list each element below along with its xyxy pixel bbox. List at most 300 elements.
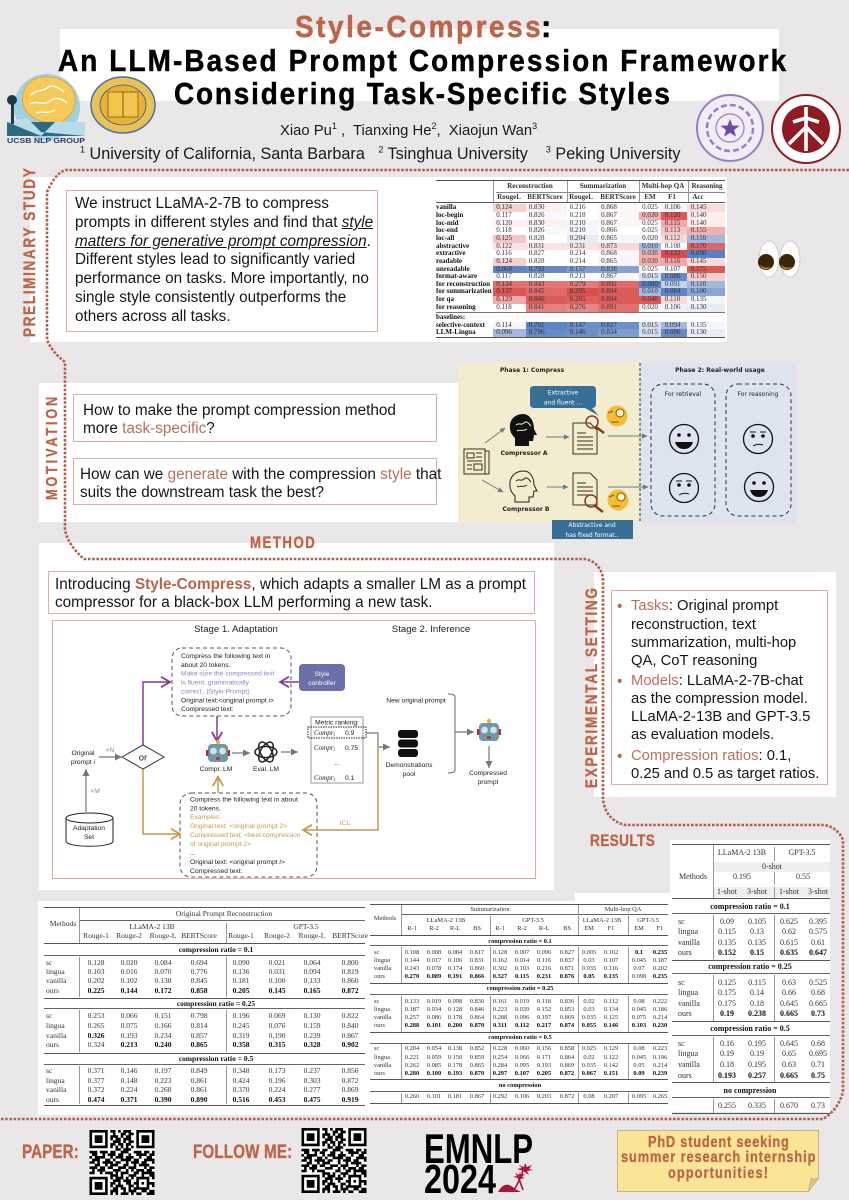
- title: Style-Compress: [295, 10, 541, 44]
- prompt box: ICL examples: Compressed text:: [190, 868, 243, 875]
- table: original prompt reconstruction: 0.076: [269, 1021, 285, 1030]
- heatmap table: styles across tasks: 0.214: [570, 257, 586, 265]
- icon: source document: [464, 449, 489, 474]
- QR code: paper: [90, 1130, 154, 1195]
- heatmap table: styles across tasks: 0.030: [642, 257, 658, 265]
- table: original prompt reconstruction: 0.145: [269, 986, 285, 995]
- table: original prompt reconstruction: 0.371: [121, 1095, 137, 1104]
- heatmap table: styles across tasks: loc-begin: [436, 211, 463, 219]
- table: summarization and multi-hop QA: 0.122: [604, 1054, 618, 1061]
- table: summarization and multi-hop QA: 0.08: [633, 998, 645, 1005]
- logo: Tsinghua seal: [696, 94, 764, 162]
- table: summarization and multi-hop QA: 0.103: [515, 965, 529, 972]
- icon: compressed document A: [573, 423, 597, 454]
- table: summarization and multi-hop QA: sc: [374, 998, 379, 1005]
- metric ranking box: [308, 717, 366, 783]
- table: original prompt reconstruction: 0.094: [304, 967, 320, 976]
- table: CoT reasoning shots: 0.255: [718, 1101, 736, 1110]
- text block: experimental setup: [611, 590, 828, 785]
- original prompt label: ×M: [90, 788, 100, 795]
- table: original prompt reconstruction: lingua: [46, 1076, 65, 1085]
- arrows: [482, 428, 648, 492]
- table: summarization and multi-hop QA: 0.864: [470, 1014, 484, 1021]
- table: original prompt reconstruction: 0.224: [269, 1085, 285, 1094]
- heatmap table: styles across tasks: BERTScore: [600, 193, 636, 201]
- callout: extractive and fluent: Extractive: [548, 390, 579, 396]
- stage headings: [194, 624, 470, 635]
- table: original prompt reconstruction: 0.856: [342, 1066, 358, 1075]
- table: original prompt reconstruction: Rouge-1: [228, 931, 254, 940]
- table: original prompt reconstruction: 0.223: [155, 1076, 171, 1085]
- table: summarization and multi-hop QA: 0.1: [635, 949, 643, 956]
- icon: evaluation LM knot: Eval. LM: [253, 766, 279, 773]
- table: summarization and multi-hop QA: 0.106: [515, 1093, 529, 1100]
- heatmap table: styles across tasks: 0.135: [691, 320, 707, 328]
- text block: preliminary finding: Different styles lead to significantly varied: [75, 251, 355, 268]
- heatmap table: styles across tasks: LLM-Lingua: [436, 328, 476, 336]
- text block: method intro: compressor for a black-box LLM performing a new task.: [55, 594, 432, 611]
- table: summarization and multi-hop QA: 0.859: [470, 1054, 484, 1061]
- heatmap table: styles across tasks: abstractive: [436, 242, 469, 250]
- table: original prompt reconstruction: 0.840: [342, 1021, 358, 1030]
- text block: preliminary finding: We instruct LLaMA-2-7B to compress: [75, 195, 329, 212]
- table: CoT reasoning shots: 0.65: [782, 1049, 796, 1058]
- table: summarization and multi-hop QA: vanilla: [374, 1062, 391, 1069]
- prompt box: ICL examples: Compressed text: <best compression: [190, 832, 301, 839]
- heatmap table: styles across tasks: 0.137: [496, 287, 512, 295]
- table: summarization and multi-hop QA: 0.112: [604, 998, 618, 1005]
- table: original prompt reconstruction: 0.103: [88, 967, 104, 976]
- table: CoT reasoning shots: ours: [678, 1009, 692, 1018]
- table: summarization and multi-hop QA: 0.075: [632, 1014, 646, 1021]
- table: summarization and multi-hop QA: 0.059: [427, 1054, 441, 1061]
- table: original prompt reconstruction: 0.370: [233, 1085, 249, 1094]
- table: original prompt reconstruction: 0.064: [304, 958, 320, 967]
- logo: EMNLP 2024: [424, 1128, 533, 1196]
- illustration: phase 1 compress and phase 2 real-world usage: Phase 1: Compress: [500, 367, 565, 374]
- panel: for retrieval: [651, 384, 715, 516]
- heatmap table: styles across tasks: 0.025: [642, 226, 658, 234]
- adaptation set cylinder: Set: [84, 834, 94, 841]
- heatmap table: styles across tasks: 0.827: [601, 320, 617, 328]
- table: CoT reasoning shots: no compression: [724, 1086, 776, 1095]
- table: summarization and multi-hop QA: 0.221: [405, 1054, 419, 1061]
- heatmap table: styles across tasks: 0.838: [601, 264, 617, 272]
- table: summarization and multi-hop QA: lingua: [374, 1006, 390, 1013]
- heatmap table: styles across tasks: 0.830: [529, 218, 545, 226]
- prompt box: style prompt: correct...[Style Prompt]: [181, 688, 249, 696]
- heatmap table: styles across tasks: 0.216: [570, 203, 586, 211]
- heatmap table: styles across tasks: 0.826: [529, 226, 545, 234]
- table: summarization and multi-hop QA: 0.214: [653, 1014, 667, 1021]
- table: original prompt reconstruction: 0.181: [233, 976, 249, 985]
- table: original prompt reconstruction: LLaMA-2 13B: [129, 922, 175, 931]
- table: CoT reasoning shots: 0.135: [718, 938, 736, 947]
- heatmap table: styles across tasks: 0.279: [570, 280, 586, 288]
- table: original prompt reconstruction: 0.919: [342, 1095, 358, 1104]
- heatmap table: styles across tasks: Multi-hop QA: [642, 182, 684, 190]
- text block: method intro: [48, 571, 535, 614]
- table: original prompt reconstruction: 0.130: [304, 1011, 320, 1020]
- table: summarization and multi-hop QA: 0.228: [493, 1045, 507, 1052]
- callout: extractive and fluent: [530, 386, 599, 416]
- table: CoT reasoning shots: 0.62: [782, 927, 796, 936]
- heatmap table: styles across tasks: 0.213: [570, 272, 586, 280]
- title: :: [541, 9, 551, 44]
- callout: abstractive and fixed format: [552, 520, 633, 539]
- table: summarization and multi-hop QA: 0.108: [405, 949, 419, 956]
- table: CoT reasoning shots: 0.115: [718, 927, 736, 936]
- style controller: [299, 664, 345, 691]
- table: summarization and multi-hop QA: 0.869: [560, 1014, 574, 1021]
- table: CoT reasoning shots: compression ratio = 0.1: [710, 902, 790, 911]
- table: summarization and multi-hop QA: 0.872: [560, 1070, 574, 1077]
- title: An LLM-Based Prompt Compression Framework: [58, 44, 787, 78]
- table: original prompt reconstruction: 0.196: [269, 1076, 285, 1085]
- table: CoT reasoning shots: Methods: [679, 872, 707, 881]
- table: summarization and multi-hop QA: 0.162: [493, 957, 507, 964]
- heatmap table: styles across tasks: 0.010: [642, 287, 658, 295]
- table: CoT reasoning shots: [672, 844, 830, 1114]
- table: summarization and multi-hop QA: 0.193: [537, 1062, 551, 1069]
- table: summarization and multi-hop QA: 0.125: [604, 1014, 618, 1021]
- heatmap table: styles across tasks: 0.866: [601, 226, 617, 234]
- table: summarization and multi-hop QA: 0.864: [560, 1054, 574, 1061]
- table: CoT reasoning shots: lingua: [678, 927, 698, 936]
- heatmap table: styles across tasks: BERTScore: [527, 193, 563, 201]
- text block: experimental setup: •: [617, 673, 622, 690]
- table: summarization and multi-hop QA: 0.089: [427, 973, 441, 980]
- table: summarization and multi-hop QA: 0.327: [493, 973, 507, 980]
- heatmap table: styles across tasks: 0.107: [665, 264, 681, 272]
- table: CoT reasoning shots: 0.105: [748, 917, 766, 926]
- table: CoT reasoning shots: 0.625: [780, 917, 798, 926]
- table: original prompt reconstruction: ours: [46, 1040, 59, 1049]
- heatmap table: styles across tasks: 0.116: [496, 249, 512, 257]
- heatmap table: styles across tasks: RougeL: [497, 193, 521, 201]
- table: CoT reasoning shots: ours: [678, 948, 692, 957]
- text block: preliminary finding: performance on tasks. More importantly, no: [75, 270, 369, 287]
- heatmap table: styles across tasks: 0.868: [601, 203, 617, 211]
- table: CoT reasoning shots: 0.13: [750, 927, 764, 936]
- title: [58, 9, 787, 111]
- table: CoT reasoning shots: lingua: [678, 1049, 698, 1058]
- table: summarization and multi-hop QA: 0.836: [560, 998, 574, 1005]
- heatmap table: styles across tasks: Acc: [692, 193, 704, 201]
- table: original prompt reconstruction: 0.822: [342, 1011, 358, 1020]
- table: CoT reasoning shots: 0.665: [809, 999, 827, 1008]
- table: original prompt reconstruction: Rouge-2: [264, 931, 290, 940]
- table: original prompt reconstruction: 0.237: [304, 1066, 320, 1075]
- table: summarization and multi-hop QA: 0.116: [604, 965, 618, 972]
- table: original prompt reconstruction: ours: [46, 1095, 59, 1104]
- heatmap table: styles across tasks: 0.145: [691, 203, 707, 211]
- table: summarization and multi-hop QA: 0.096: [537, 949, 551, 956]
- panel: for reasoning: For reasoning: [738, 391, 779, 398]
- table: CoT reasoning shots: 3-shot: [747, 887, 767, 896]
- table: original prompt reconstruction: 0.475: [304, 1095, 320, 1104]
- heatmap table: styles across tasks: 0.867: [601, 218, 617, 226]
- table: summarization and multi-hop QA: 0.115: [515, 973, 529, 980]
- original prompt label: [71, 747, 115, 795]
- table: CoT reasoning shots: 0.55: [796, 872, 810, 881]
- table: summarization and multi-hop QA: 0.005: [582, 949, 596, 956]
- heatmap table: styles across tasks: 0.894: [601, 295, 617, 303]
- table: CoT reasoning shots: 0.125: [718, 978, 736, 987]
- table: CoT reasoning shots: 1-shot: [779, 887, 799, 896]
- heatmap table: styles across tasks: 0.846: [529, 295, 545, 303]
- table: CoT reasoning shots: 0.66: [782, 988, 796, 997]
- table: original prompt reconstruction: BERTScore: [332, 931, 368, 940]
- table: original prompt reconstruction: 0.872: [342, 986, 358, 995]
- table: summarization and multi-hop QA: 0.869: [560, 1062, 574, 1069]
- table: summarization and multi-hop QA: 0.214: [653, 1062, 667, 1069]
- table: summarization and multi-hop QA: 0.217: [537, 1022, 551, 1029]
- stage headings: Stage 1. Adaptation: [194, 624, 278, 635]
- table: CoT reasoning shots: compression ratio = 0.5: [710, 1024, 790, 1033]
- table: summarization and multi-hop QA: 0.197: [537, 1014, 551, 1021]
- table: summarization and multi-hop QA: 0.035: [582, 1062, 596, 1069]
- prompt box: style prompt: [172, 648, 291, 716]
- panel: results tables: [38, 901, 672, 1115]
- table: summarization and multi-hop QA: 0.101: [427, 1093, 441, 1100]
- table: summarization and multi-hop QA: 0.858: [560, 1045, 574, 1052]
- table: original prompt reconstruction: 0.100: [269, 976, 285, 985]
- table: summarization and multi-hop QA: 0.852: [470, 1045, 484, 1052]
- table: original prompt reconstruction: 0.151: [155, 1011, 171, 1020]
- logo: UCSB NLP group: [7, 74, 85, 145]
- table: CoT reasoning shots: 0.68: [811, 1039, 825, 1048]
- table: summarization and multi-hop QA: vanilla: [374, 1014, 391, 1021]
- table: original prompt reconstruction: 0.239: [304, 1031, 320, 1040]
- table: original prompt reconstruction: 0.193: [121, 1031, 137, 1040]
- heatmap table: styles across tasks: 0.134: [496, 280, 512, 288]
- heatmap table: styles across tasks: 0.868: [601, 249, 617, 257]
- table: summarization and multi-hop QA: R-2: [517, 925, 527, 932]
- logo: UC seal: [90, 76, 156, 134]
- table: original prompt reconstruction: 0.348: [233, 1066, 249, 1075]
- table: summarization and multi-hop QA: 0.831: [470, 957, 484, 964]
- table: summarization and multi-hop QA: compression ratio = 0.1: [488, 938, 552, 945]
- heatmap table: styles across tasks: 0.094: [665, 320, 681, 328]
- table: summarization and multi-hop QA: 0.235: [653, 949, 667, 956]
- metric ranking box: Compr: [314, 774, 333, 782]
- diagram: adaptation and inference stages: [52, 620, 536, 879]
- panel: preliminary study: [30, 177, 727, 342]
- table: summarization and multi-hop QA: 0.095: [515, 1062, 529, 1069]
- table: original prompt reconstruction: 0.245: [233, 1021, 249, 1030]
- heatmap table: styles across tasks: EM: [644, 193, 656, 201]
- panel: method: [39, 543, 554, 890]
- table: summarization and multi-hop QA: 0.239: [653, 1070, 667, 1077]
- heatmap table: styles across tasks: 0.122: [496, 242, 512, 250]
- callout: second question: How can we generate with the compression style that: [80, 466, 441, 483]
- table: summarization and multi-hop QA: 0.128: [493, 949, 507, 956]
- table: original prompt reconstruction: 0.234: [155, 1031, 171, 1040]
- table: CoT reasoning shots: 0.75: [811, 1071, 825, 1080]
- table: original prompt reconstruction: 0.324: [88, 1040, 104, 1049]
- table: CoT reasoning shots: sc: [678, 978, 685, 987]
- table: original prompt reconstruction: 0.358: [233, 1040, 249, 1049]
- heatmap table: styles across tasks: F1: [668, 193, 676, 201]
- table: original prompt reconstruction: 0.390: [155, 1095, 171, 1104]
- brown arrows: [143, 747, 378, 834]
- text block: experimental setup: 0.25 and 0.5 as target ratios.: [631, 766, 819, 782]
- table: summarization and multi-hop QA: LLaMA-2 13B: [427, 917, 465, 924]
- heatmap table: styles across tasks: 0.210: [570, 218, 586, 226]
- heatmap table: styles across tasks: 0.204: [570, 234, 586, 242]
- table: summarization and multi-hop QA: ours: [374, 973, 385, 980]
- table: CoT reasoning shots: 0.238: [748, 1009, 766, 1018]
- panel: for retrieval: For retrieval: [665, 391, 702, 398]
- text block: experimental setup: •: [617, 748, 622, 765]
- table: original prompt reconstruction: 0.205: [233, 986, 249, 995]
- table: summarization and multi-hop QA: Methods: [374, 915, 396, 922]
- table: original prompt reconstruction: 0.453: [269, 1095, 285, 1104]
- heatmap table: styles across tasks: 0.113: [665, 226, 680, 234]
- table: CoT reasoning shots: 0.195: [733, 872, 751, 881]
- icon: palm island: [498, 1163, 533, 1192]
- heatmap table: styles across tasks: 0.115: [665, 218, 680, 226]
- table: original prompt reconstruction: 0.202: [88, 976, 104, 985]
- table: summarization and multi-hop QA: F1: [657, 925, 663, 932]
- table: summarization and multi-hop QA: 0.174: [448, 965, 462, 972]
- prompt box: ICL examples: Examples:: [190, 814, 221, 821]
- heatmap table: styles across tasks: 0.145: [691, 257, 707, 265]
- heatmap table: styles across tasks: 0.796: [529, 328, 545, 336]
- heatmap table: styles across tasks: 0.130: [691, 303, 707, 311]
- icon: demonstrations pool: Demonstrations: [386, 762, 433, 769]
- text block: preliminary finding: others across all tasks.: [75, 308, 231, 325]
- table: original prompt reconstruction: lingua: [46, 1021, 65, 1030]
- callout: first question: How to make the prompt compression method: [83, 402, 396, 419]
- heatmap table: styles across tasks: 0.120: [496, 218, 512, 226]
- heatmap table: styles across tasks: 0.120: [665, 211, 681, 219]
- table: summarization and multi-hop QA: 0.08: [633, 1045, 645, 1052]
- sticky note: PhD student seeking internship: PhD student seeking: [648, 1134, 789, 1151]
- table: summarization and multi-hop QA: 0.223: [493, 1006, 507, 1013]
- text block: preliminary finding: single style consistently outperforms the: [75, 289, 346, 306]
- heatmap table: styles across tasks: 0.122: [665, 249, 681, 257]
- table: summarization and multi-hop QA: no compression: [499, 1082, 541, 1089]
- table: CoT reasoning shots: 0.645: [780, 1039, 798, 1048]
- table: CoT reasoning shots: 0.615: [780, 938, 798, 947]
- prompt box: ICL examples: Original text: <original prompt i>: [190, 859, 285, 866]
- heatmap table: styles across tasks: 0.155: [691, 226, 707, 234]
- heatmap table: styles across tasks: 0.110: [691, 234, 706, 242]
- table: summarization and multi-hop QA: 0.288: [405, 1022, 419, 1029]
- table: original prompt reconstruction: 0.133: [304, 976, 320, 985]
- heatmap table: styles across tasks: 0.130: [691, 328, 707, 336]
- affiliations: 1 University of California, Santa Barbara 2 Tsinghua University 3 Peking University: [80, 145, 680, 163]
- table: summarization and multi-hop QA: 0.262: [405, 1062, 419, 1069]
- heatmap table: styles across tasks: 0.129: [496, 295, 512, 303]
- heatmap table: styles across tasks: 0.040: [642, 295, 658, 303]
- table: original prompt reconstruction: 0.890: [191, 1095, 207, 1104]
- table: summarization and multi-hop QA: 0.138: [448, 1045, 462, 1052]
- heatmap table: styles across tasks: 0.086: [665, 328, 681, 336]
- table: original prompt reconstruction: GPT-3.5: [293, 922, 319, 931]
- table: summarization and multi-hop QA: 0.084: [448, 949, 462, 956]
- table: CoT reasoning shots: ours: [678, 1071, 692, 1080]
- table: original prompt reconstruction: 0.102: [121, 976, 137, 985]
- table: CoT reasoning shots: 0.61: [811, 938, 825, 947]
- table: original prompt reconstruction: compression ratio = 0.1: [179, 945, 253, 954]
- callout: first question: more task-specific?: [83, 420, 215, 437]
- text block: experimental setup: Models: LLaMA-2-7B-chat: [631, 673, 803, 689]
- purple arrows: [143, 682, 299, 745]
- table: original prompt reconstruction: 0.860: [342, 976, 358, 985]
- table: CoT reasoning shots: 0.18: [720, 1060, 734, 1069]
- table: summarization and multi-hop QA: 0.178: [448, 1062, 462, 1069]
- icon: inference robot: Compressed: [469, 770, 507, 777]
- text block: experimental setup: reconstruction, text: [631, 617, 756, 633]
- prompt box: ICL examples: Compress the following text in about: [190, 796, 298, 804]
- table: CoT reasoning shots: 0.73: [811, 1009, 825, 1018]
- table: summarization and multi-hop QA: 0.02: [583, 998, 595, 1005]
- table: summarization and multi-hop QA: 0.098: [632, 973, 646, 980]
- heatmap table: styles across tasks: 0.124: [496, 203, 512, 211]
- table: summarization and multi-hop QA: 0.106: [448, 957, 462, 964]
- table: summarization and multi-hop QA: 0.08: [583, 1093, 595, 1100]
- table: summarization and multi-hop QA: 0.02: [583, 1054, 595, 1061]
- heatmap table: styles across tasks: 0.891: [601, 303, 617, 311]
- table: original prompt reconstruction: 0.849: [191, 1066, 207, 1075]
- prompt box: ICL examples: of original prompt 2>: [190, 841, 251, 848]
- heatmap table: styles across tasks: 0.214: [570, 249, 586, 257]
- panel: for reasoning: [726, 384, 791, 516]
- table: CoT reasoning shots: 0.175: [718, 988, 736, 997]
- heatmap table: styles across tasks: 0.147: [570, 320, 586, 328]
- heatmap table: styles across tasks: 0.218: [570, 211, 586, 219]
- table: summarization and multi-hop QA: 0.045: [632, 1006, 646, 1013]
- text block: experimental setup: QA, CoT reasoning: [631, 653, 757, 669]
- table: summarization and multi-hop QA: 0.216: [537, 965, 551, 972]
- table: summarization and multi-hop QA: R-2: [429, 925, 439, 932]
- table: original prompt reconstruction: 0.165: [304, 986, 320, 995]
- table: original prompt reconstruction: 0.020: [121, 958, 137, 967]
- table: original prompt reconstruction: 0.872: [342, 1076, 358, 1085]
- prompt box: style prompt: Make sure the compressed text: [181, 670, 274, 678]
- heatmap table: styles across tasks: Reasoning: [691, 182, 723, 190]
- table: summarization and multi-hop QA: 0.865: [470, 1062, 484, 1069]
- or diamond: [122, 745, 164, 769]
- table: original prompt reconstruction: 0.328: [304, 1040, 320, 1049]
- table: summarization and multi-hop QA: 0.100: [427, 1070, 441, 1077]
- heatmap table: styles across tasks: 0.140: [691, 211, 707, 219]
- table: summarization and multi-hop QA: 0.045: [632, 957, 646, 964]
- table: summarization and multi-hop QA: 0.055: [582, 1022, 596, 1029]
- heatmap table: styles across tasks: 0.025: [642, 203, 658, 211]
- table: summarization and multi-hop QA: 0.846: [470, 1006, 484, 1013]
- heatmap table: styles across tasks: 0.106: [665, 303, 681, 311]
- table: original prompt reconstruction: Rouge-2: [116, 931, 142, 940]
- heatmap table: styles across tasks: for reasoning: [436, 303, 476, 311]
- icon: demonstrations pool: [386, 730, 433, 778]
- sticky note: PhD student seeking internship: [617, 1130, 820, 1192]
- illustration: phase 1 compress and phase 2 real-world usage: Compressor B: [502, 506, 550, 513]
- prompt box: style prompt: is fluent, grammatically: [181, 680, 250, 686]
- table: original prompt reconstruction: 0.319: [233, 1031, 249, 1040]
- table: summarization and multi-hop QA: 0.181: [448, 1093, 462, 1100]
- table: original prompt reconstruction: 0.070: [155, 967, 171, 976]
- table: CoT reasoning shots: 0.14: [750, 988, 764, 997]
- table: original prompt reconstruction: 0.128: [88, 958, 104, 967]
- callout: extractive and fluent: and fluent ...: [544, 400, 582, 406]
- heatmap table: styles across tasks: 0.285: [570, 295, 586, 303]
- table: original prompt reconstruction: [44, 907, 368, 1106]
- heatmap table: styles across tasks: 0.828: [529, 234, 545, 242]
